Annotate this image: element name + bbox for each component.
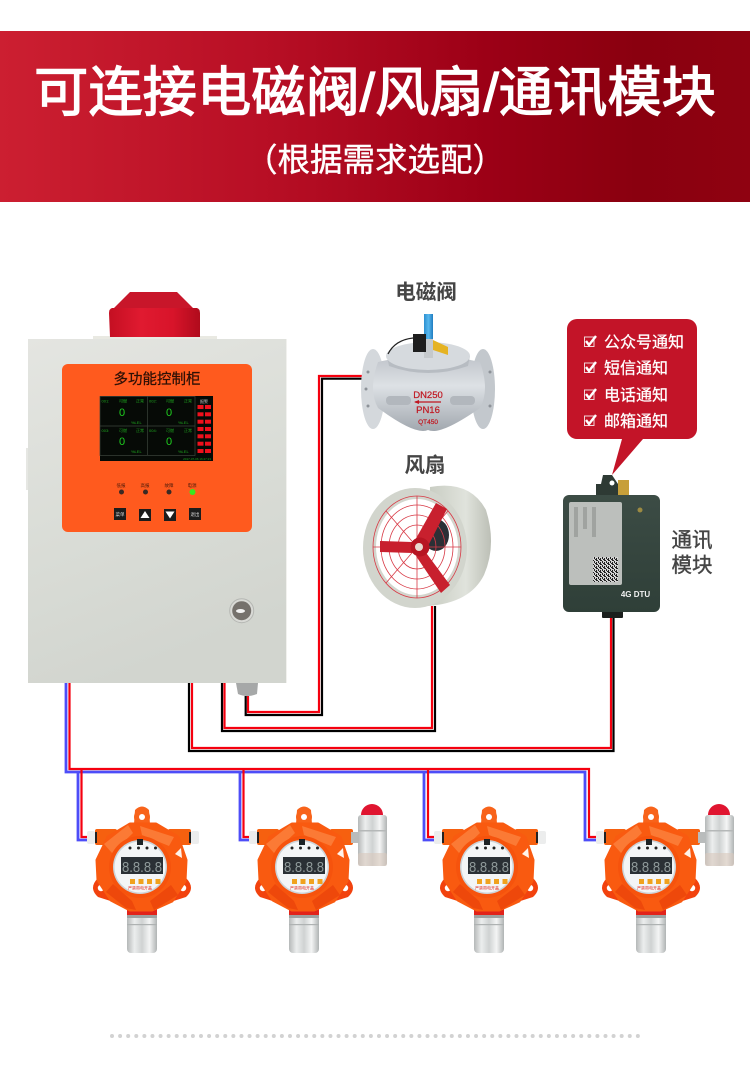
- gas detector 4 with alarm: 8.8.8.8: [631, 859, 671, 876]
- cabinet key lock: [230, 599, 254, 623]
- callout: notification list: 公众号通知: [604, 334, 684, 352]
- icon: solenoid valve: QT450: [418, 419, 438, 426]
- wiring: bus from cabinet to gas detectors: [66, 683, 596, 840]
- LCD screen: 正常: [136, 427, 144, 433]
- subtitle: （根据需求选配）: [245, 142, 505, 178]
- LCD screen: 003:: [102, 428, 109, 433]
- callout: notification list: 邮箱通知: [604, 412, 668, 430]
- wiring: cabinet to valve, fan and module: [189, 376, 614, 751]
- gas detector 2 with alarm: 严禁带电开盖: [290, 884, 314, 890]
- callout: notification list: 短信通知: [604, 360, 668, 378]
- icon: solenoid valve: PN16: [416, 405, 440, 416]
- icon: red alarm lamp: [93, 292, 217, 340]
- cable gland: [236, 683, 258, 696]
- control buttons: 退出: [190, 511, 200, 518]
- label: fan: 风扇: [404, 453, 446, 477]
- label: communication module: [672, 529, 712, 577]
- LCD screen: 2017-07-06 16:27:23: [183, 457, 211, 461]
- LCD screen: %LEL: [131, 420, 142, 425]
- callout: notification list: 电话通知: [604, 386, 668, 404]
- LCD screen: 004:: [149, 428, 157, 433]
- LCD screen: 0: [119, 436, 125, 448]
- LCD screen: 正常: [184, 427, 192, 433]
- LCD screen: %LEL: [178, 420, 189, 425]
- indicator lights: 故障: [164, 482, 174, 489]
- LCD screen: 正常: [136, 398, 144, 404]
- icon: 4G DTU communication module: [563, 475, 660, 618]
- indicator lights: 电源: [188, 482, 197, 489]
- LCD screen: 可燃: [166, 427, 174, 433]
- LCD screen: %LEL: [131, 449, 142, 454]
- LCD screen: 002:: [149, 398, 157, 404]
- label: communication module: 通讯: [672, 529, 712, 552]
- LCD screen: 可燃: [166, 398, 174, 404]
- control buttons: 菜单: [116, 511, 125, 518]
- LCD screen: 001:: [102, 398, 109, 404]
- control buttons: [114, 508, 201, 521]
- LCD screen: 正常: [184, 398, 192, 404]
- LCD screen: 可燃: [119, 398, 127, 404]
- icon: axial fan: [363, 486, 491, 608]
- panel title: 多功能控制柜: [114, 371, 200, 388]
- title: 可连接电磁阀/风扇/通讯模块: [34, 63, 716, 123]
- indicator lights: 高报: [140, 482, 150, 489]
- label: solenoid valve: 电磁阀: [395, 281, 457, 304]
- orange control panel: [62, 364, 252, 532]
- gas detector 3: 严禁带电开盖: [475, 884, 499, 890]
- icon: solenoid valve: DN250: [413, 390, 443, 401]
- LCD screen: 0: [119, 407, 125, 419]
- LCD screen: %LEL: [178, 449, 189, 454]
- gas detector 2 with alarm: [249, 804, 387, 953]
- gas detector 3: 8.8.8.8: [469, 859, 509, 876]
- gas detector 1: [87, 806, 199, 953]
- gas detector 2 with alarm: 8.8.8.8: [284, 859, 324, 876]
- LCD screen: 0: [166, 407, 172, 419]
- LCD screen: 0: [166, 436, 172, 448]
- label: communication module: 模块: [672, 554, 712, 577]
- icon: solenoid valve: [361, 314, 495, 431]
- gas detector 4 with alarm: 严禁带电开盖: [637, 884, 661, 890]
- callout: notification list: [567, 319, 697, 475]
- indicator lights: [116, 482, 197, 495]
- gas detector 3: [434, 806, 546, 953]
- indicator lights: 低报: [116, 482, 126, 489]
- panel: control cabinet: [26, 339, 287, 683]
- LCD screen: 报警: [200, 398, 208, 404]
- gas detector 1: 严禁带电开盖: [128, 884, 152, 890]
- gas detector 1: 8.8.8.8: [122, 859, 162, 876]
- LCD screen: [100, 396, 213, 461]
- icon: 4G DTU communication module: 4G DTU: [621, 590, 650, 599]
- LCD screen: 可燃: [119, 427, 127, 433]
- header banner: [0, 31, 750, 202]
- gas detector 4 with alarm: [596, 804, 734, 953]
